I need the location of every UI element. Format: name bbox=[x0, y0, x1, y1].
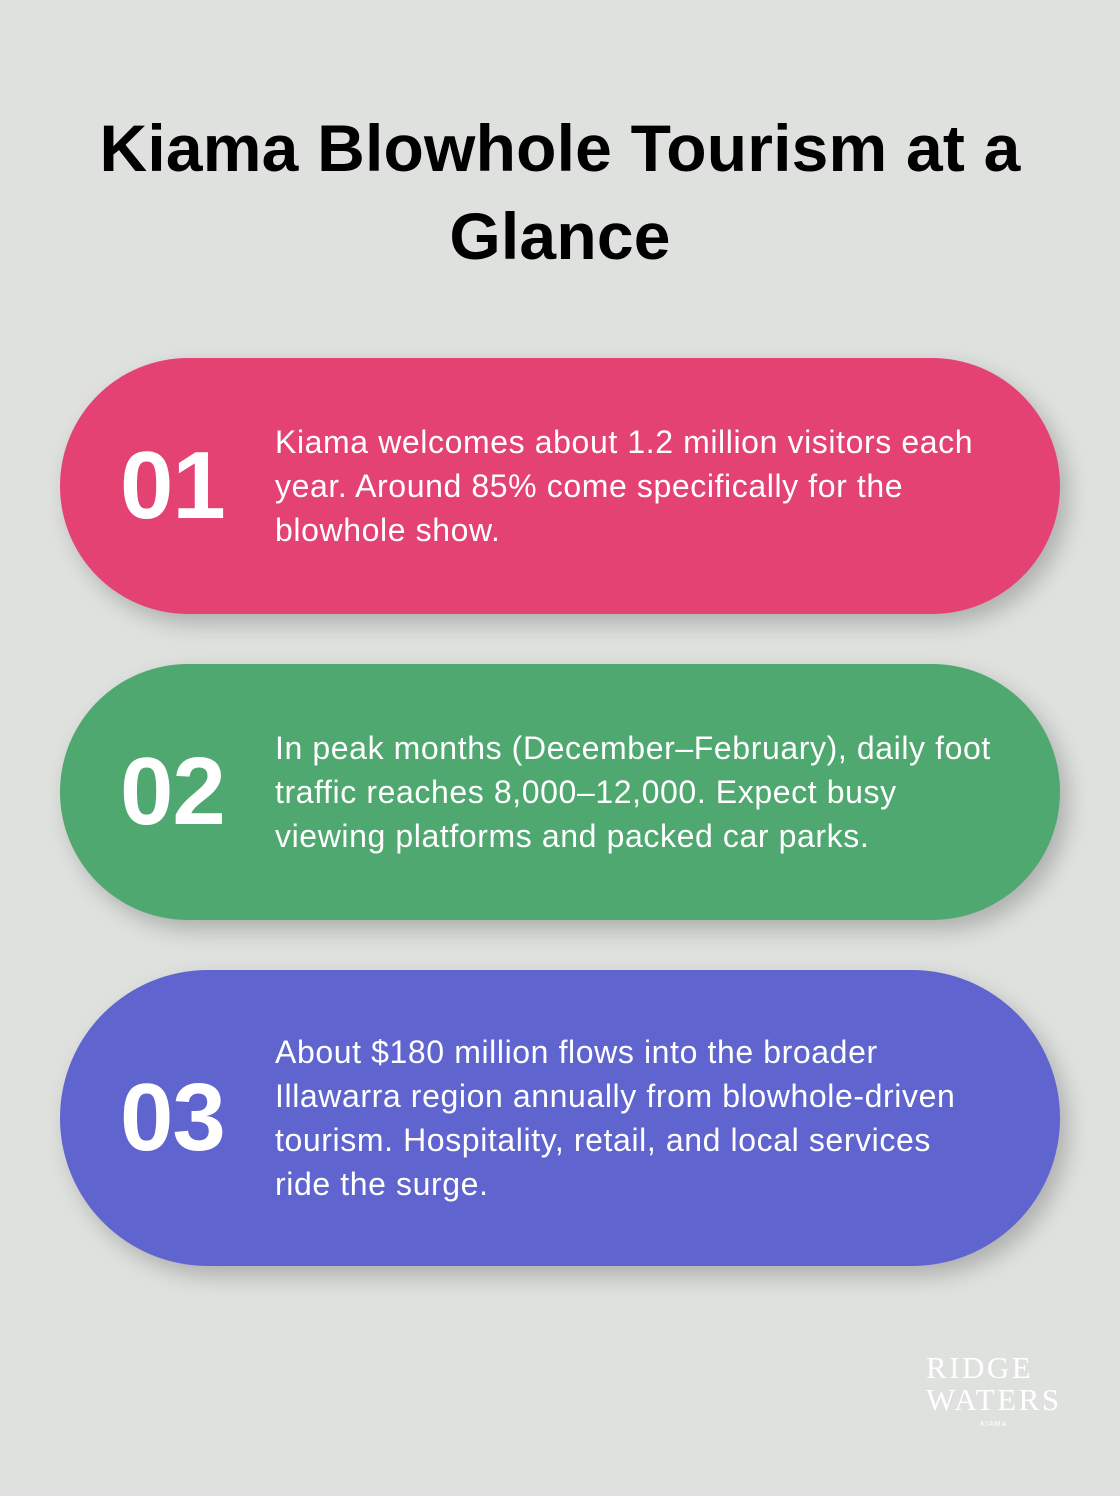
card 02 bbox=[60, 664, 1060, 920]
text 01: blowhole show. bbox=[275, 512, 500, 548]
text 01: year. Around 85% come specifically for the bbox=[275, 468, 903, 504]
text 03: tourism. Hospitality, retail, and local services bbox=[275, 1122, 931, 1158]
title: Glance bbox=[449, 199, 671, 273]
text 02: viewing platforms and packed car parks. bbox=[275, 818, 869, 854]
text 01: Kiama welcomes about 1.2 million visitors each bbox=[275, 424, 973, 460]
title bbox=[99, 111, 1021, 273]
text 02: In peak months (December–February), daily foot bbox=[275, 730, 991, 766]
text 03: Illawarra region annually from blowhole-driven bbox=[275, 1078, 955, 1114]
logo: KIAMA bbox=[980, 1421, 1007, 1428]
card 03 bbox=[60, 970, 1060, 1266]
logo: RIDGE bbox=[926, 1350, 1033, 1385]
text 03 bbox=[275, 1034, 955, 1202]
logo: WATERS bbox=[926, 1382, 1062, 1417]
text 02 bbox=[275, 730, 991, 854]
text 01 bbox=[275, 424, 973, 548]
card 01 bbox=[60, 358, 1060, 614]
title: Kiama Blowhole Tourism at a bbox=[99, 111, 1021, 185]
number 02: 02 bbox=[120, 738, 225, 845]
number 03: 03 bbox=[120, 1064, 225, 1171]
text 03: ride the surge. bbox=[275, 1166, 489, 1202]
text 03: About $180 million flows into the broader bbox=[275, 1034, 878, 1070]
number 01: 01 bbox=[120, 432, 225, 539]
logo bbox=[926, 1350, 1062, 1428]
text 02: traffic reaches 8,000–12,000. Expect busy bbox=[275, 774, 897, 810]
